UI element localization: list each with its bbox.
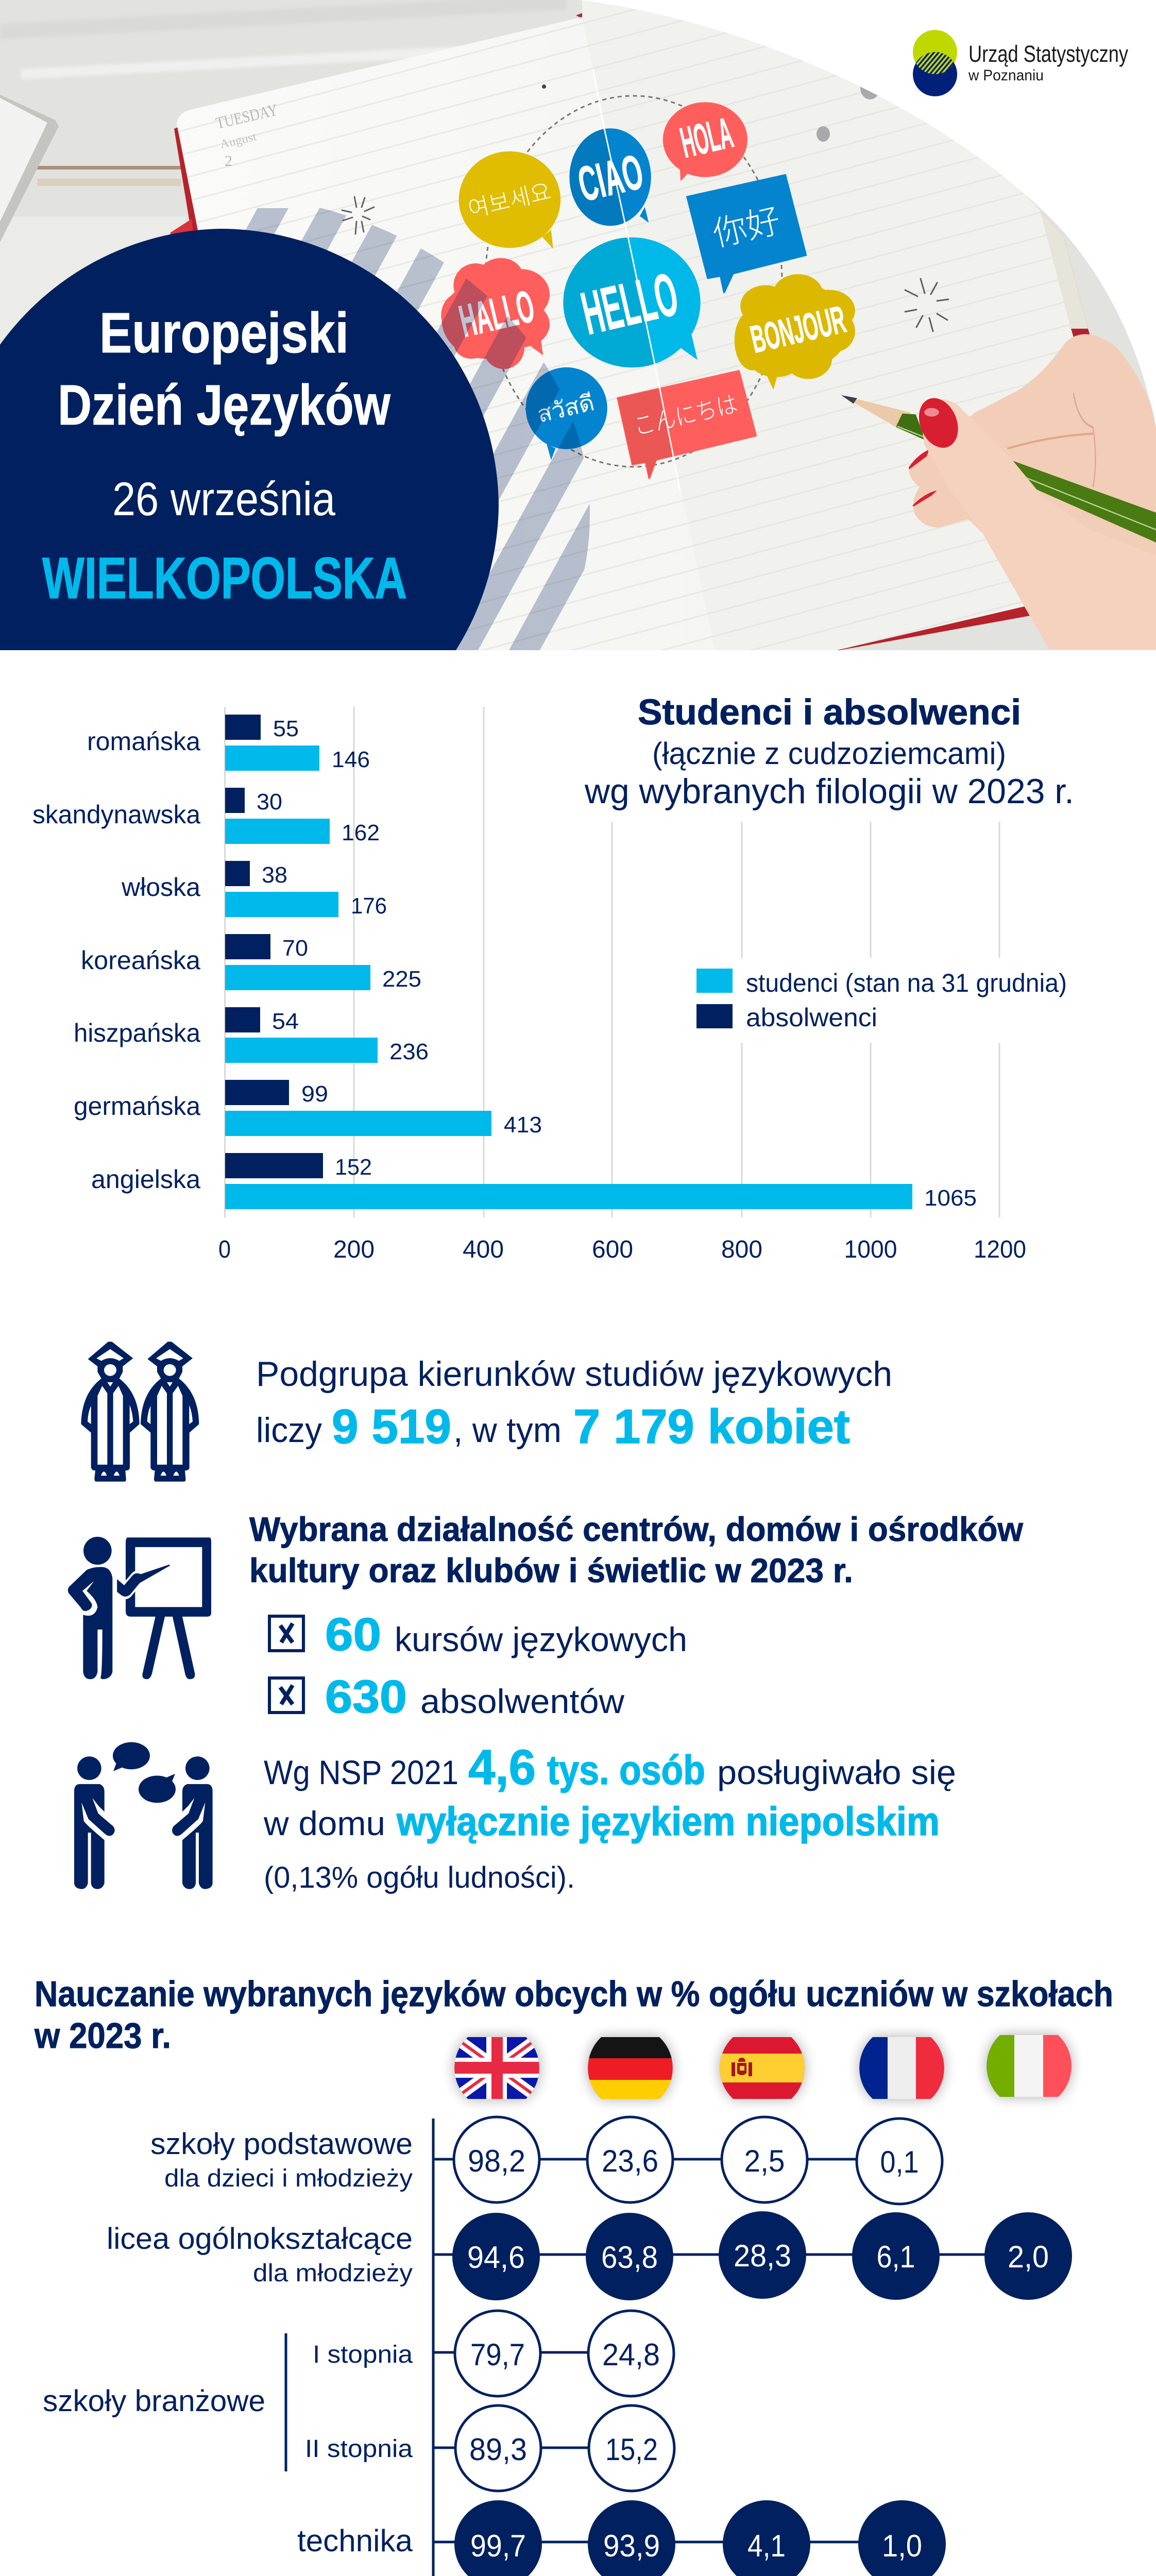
icon: presenter at board xyxy=(68,1537,211,1679)
category labels: skandynawska xyxy=(32,800,200,829)
red fingernails small xyxy=(908,449,929,469)
value labels: 152 xyxy=(335,1155,372,1180)
row: vocational level I: 79,7 xyxy=(470,2337,525,2372)
page edges xyxy=(1041,211,1088,329)
heading: foreign language teaching: w 2023 r. xyxy=(34,2015,171,2056)
fold line xyxy=(593,69,679,489)
heading: cultural centres xyxy=(249,1510,1024,1589)
bars: graduates xyxy=(225,715,323,1178)
sparkle large xyxy=(905,279,948,331)
row labels: II stopnia xyxy=(305,2435,413,2463)
bubble words: BONJOUR xyxy=(746,297,849,361)
bubble: japanese xyxy=(618,371,756,479)
title: Europejski xyxy=(99,301,349,365)
chart title: wg wybranych filologii w 2023 r. xyxy=(584,772,1074,811)
row: high schools: 28,3 xyxy=(734,2239,791,2273)
x axis labels: 600 xyxy=(592,1236,633,1263)
row: high schools xyxy=(452,2211,1072,2300)
item: language courses xyxy=(269,1609,687,1660)
title: Dzień Języków xyxy=(58,374,390,437)
right page xyxy=(582,0,1074,650)
bubble words: HOLA xyxy=(676,108,737,167)
item: graduates of courses: absolwentów xyxy=(420,1682,624,1720)
planner header: August xyxy=(219,130,258,151)
x axis labels: 800 xyxy=(721,1236,762,1263)
bubble: yellow korean xyxy=(459,151,560,249)
row: vocational level II: 89,3 xyxy=(469,2432,527,2467)
item: language courses: 60 xyxy=(325,1609,381,1660)
value labels: 55 xyxy=(273,716,299,741)
bubble words: こんにちは xyxy=(630,385,741,442)
chart title: (łącznie z cudzoziemcami) xyxy=(652,736,1006,771)
row: vocational level I: 24,8 xyxy=(602,2337,660,2372)
category labels: angielska xyxy=(91,1165,200,1194)
text: study subgroup: liczy xyxy=(256,1411,322,1450)
bubble words: สวัสดี xyxy=(534,384,597,429)
flag: Italy xyxy=(987,2035,1072,2097)
x axis labels: 0 xyxy=(218,1236,231,1263)
row: technical schools: 93,9 xyxy=(603,2529,660,2563)
date: 26 września xyxy=(112,473,336,526)
row: primary schools: 0,1 xyxy=(880,2145,919,2179)
row: primary schools: 2,5 xyxy=(744,2144,785,2178)
header photo: notebook on a table xyxy=(0,0,1156,650)
flag: France xyxy=(859,2037,944,2099)
row: primary schools: 23,6 xyxy=(602,2144,658,2178)
bubble: thai xyxy=(525,367,607,460)
heading: cultural centres: Wybrana działalność centrów, domów i ośrodków xyxy=(249,1510,1024,1548)
text: census languages: Wg NSP 2021 xyxy=(264,1753,458,1791)
region: WIELKOPOLSKA xyxy=(42,546,407,611)
hand back and fingers xyxy=(909,334,1156,649)
row labels: technika xyxy=(297,2523,413,2558)
heading: foreign language teaching xyxy=(34,1974,1113,2056)
planner header: TUESDAY xyxy=(214,100,279,132)
pencil body xyxy=(896,421,1156,543)
bubble words: HELLO xyxy=(575,260,684,348)
row: high schools: 6,1 xyxy=(877,2240,915,2274)
row: technical schools: 99,7 xyxy=(470,2529,526,2563)
x axis labels: 200 xyxy=(333,1236,375,1263)
text: census languages: (0,13% ogółu ludności). xyxy=(264,1861,575,1894)
bubble: HOLA xyxy=(663,102,747,181)
text: study subgroup: 9 519 xyxy=(332,1399,451,1453)
row: vocational level II: 15,2 xyxy=(605,2432,658,2467)
text: study subgroup: , w tym xyxy=(453,1411,562,1450)
chart legend: studenci (stan na 31 grudnia) xyxy=(746,969,1067,997)
row: technical schools xyxy=(454,2500,946,2576)
diagonal translucent bands xyxy=(14,208,783,650)
item: language courses: kursów językowych xyxy=(395,1620,687,1658)
text: census languages: tys. osób xyxy=(547,1747,705,1793)
page dots xyxy=(542,84,878,142)
category labels: koreańska xyxy=(81,946,200,975)
dashed circle xyxy=(485,96,782,467)
row: primary schools: 98,2 xyxy=(468,2144,525,2178)
thumb nail xyxy=(915,390,962,456)
bars: students xyxy=(225,745,912,1209)
row labels: I stopnia xyxy=(313,2341,413,2368)
text: study subgroup xyxy=(256,1354,892,1453)
row labels: szkoły branżowe xyxy=(43,2384,265,2418)
value labels: 99 xyxy=(301,1081,328,1107)
notebook red cover xyxy=(174,4,1156,650)
row: primary schools xyxy=(454,2117,942,2204)
title circle xyxy=(0,229,499,650)
bubble: chinese xyxy=(687,175,806,293)
flag: United Kingdom xyxy=(454,2037,539,2099)
x axis labels: 400 xyxy=(463,1236,504,1263)
bubble: HALLO cloud xyxy=(441,258,550,369)
bubble words: 你好 xyxy=(707,193,785,257)
bubble words: HALLO xyxy=(455,280,539,347)
speech bubbles xyxy=(441,69,855,489)
row labels xyxy=(43,2127,413,2558)
value labels: 236 xyxy=(389,1039,429,1064)
text: census languages: w domu xyxy=(263,1804,385,1842)
left page xyxy=(177,17,715,650)
item: graduates of courses xyxy=(269,1671,624,1723)
chart title: Studenci i absolwenci xyxy=(638,692,1021,732)
fold shading xyxy=(563,128,756,479)
planner header: 2 xyxy=(225,152,232,170)
x axis labels xyxy=(218,1236,1026,1263)
category labels: hiszpańska xyxy=(74,1019,200,1047)
thumb xyxy=(920,399,1156,649)
text: study subgroup: Podgrupa kierunków studiów językowych xyxy=(256,1354,892,1394)
planner header xyxy=(215,104,276,166)
value labels: 225 xyxy=(382,967,421,992)
category labels: włoska xyxy=(121,873,200,902)
flag: Germany xyxy=(588,2037,673,2099)
row labels: dla młodzieży xyxy=(253,2260,413,2287)
row: high schools: 94,6 xyxy=(467,2240,525,2275)
value labels: 413 xyxy=(504,1112,542,1138)
row: high schools: 63,8 xyxy=(601,2240,658,2275)
row: vocational level I xyxy=(455,2311,674,2396)
white arc corner xyxy=(580,0,1156,428)
value labels: 176 xyxy=(351,893,387,919)
heading: cultural centres: kultury oraz klubów i świetlic w 2023 r. xyxy=(249,1551,853,1589)
text: study subgroup: 7 179 kobiet xyxy=(573,1399,850,1453)
text: census languages: 4,6 xyxy=(468,1740,536,1795)
row labels: dla dzieci i młodzieży xyxy=(164,2165,413,2192)
bar chart: students and graduates xyxy=(32,707,1026,1263)
icon: two people talking xyxy=(74,1742,213,1889)
row labels: licea ogólnokształcące xyxy=(107,2222,413,2256)
pencil wood and lead xyxy=(841,334,1156,649)
item: graduates of courses: 630 xyxy=(325,1671,407,1723)
row: vocational level II xyxy=(455,2405,674,2491)
row labels: szkoły podstawowe xyxy=(150,2127,413,2161)
value labels: 30 xyxy=(257,789,282,815)
value labels: 70 xyxy=(282,936,308,961)
row: technical schools: 4,1 xyxy=(747,2529,786,2563)
text: census languages: posługiwało się xyxy=(717,1753,956,1791)
bubble: HELLO xyxy=(563,238,701,367)
title xyxy=(58,301,390,437)
flag: Spain xyxy=(720,2037,805,2099)
chart title xyxy=(584,692,1074,811)
table background xyxy=(0,0,1156,650)
text: census languages xyxy=(263,1740,956,1894)
category labels xyxy=(32,727,200,1194)
red tab at left xyxy=(170,219,193,234)
value labels: 146 xyxy=(332,747,370,772)
category labels: romańska xyxy=(87,727,200,756)
row: high schools: 2,0 xyxy=(1008,2240,1049,2274)
x axis labels: 1200 xyxy=(974,1236,1026,1263)
value labels: 162 xyxy=(342,820,380,845)
category labels: germańska xyxy=(74,1092,200,1121)
icon: graduates xyxy=(81,1342,199,1482)
bubble words: 여보세요 xyxy=(464,173,554,224)
chart legend xyxy=(696,969,1067,1032)
bubble: CIAO xyxy=(569,128,651,226)
value labels: 54 xyxy=(272,1009,299,1034)
sparkle small xyxy=(342,197,374,234)
bubble words xyxy=(455,108,849,442)
value labels: 38 xyxy=(262,862,287,888)
connector lines xyxy=(286,2119,1028,2576)
small book at left edge xyxy=(0,95,59,242)
bubble: BONJOUR cloud xyxy=(735,274,855,390)
text: census languages: wyłącznie językiem niepolskim xyxy=(396,1799,940,1844)
row: technical schools: 1,0 xyxy=(882,2529,922,2563)
logo: Urząd Statystyczny: w Poznaniu xyxy=(968,67,1044,84)
value labels: 1065 xyxy=(924,1185,977,1211)
logo: Urząd Statystyczny xyxy=(913,30,1128,96)
value labels xyxy=(257,716,977,1211)
ruled lines xyxy=(177,0,1144,650)
bubble words: CIAO xyxy=(573,144,648,212)
chart legend: absolwenci xyxy=(746,1003,877,1032)
x axis labels: 1000 xyxy=(844,1236,897,1263)
